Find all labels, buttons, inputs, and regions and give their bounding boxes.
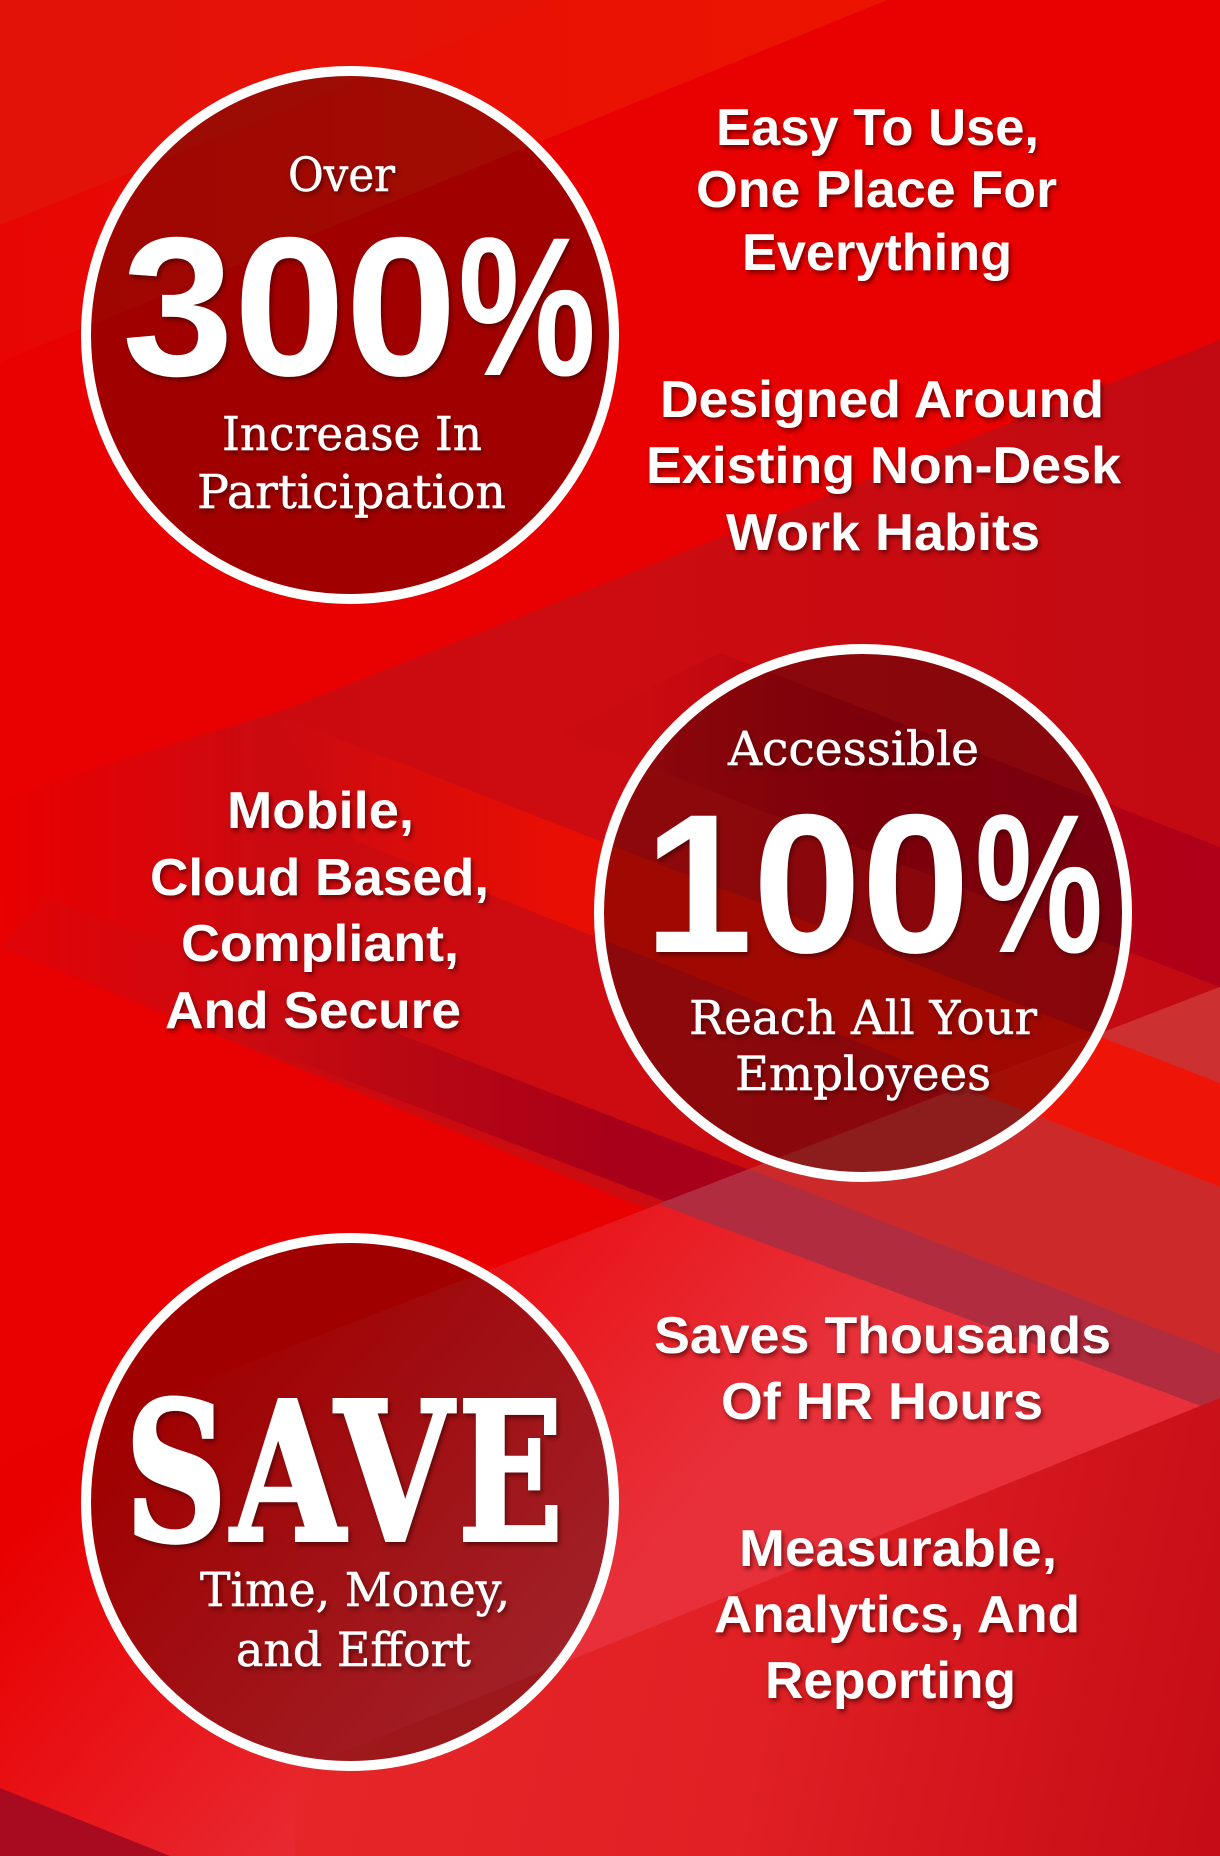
text block: mobile and secure: Compliant, [181,915,459,973]
caption: Increase In Participation: Increase In [222,407,482,462]
text block: designed around habits [646,371,1121,562]
caption: Time, Money, and Effort: Time, Money, [200,1563,510,1618]
circle panel: 300% increase in participation [86,71,614,599]
text block: easy to use: Everything [742,224,1012,282]
stat: 300%: 300 [122,196,457,417]
caption: Increase In Participation: Participation [197,465,506,520]
circle panel: save time money effort [86,1238,614,1766]
caption: Time, Money, and Effort [200,1563,510,1678]
caption: Increase In Participation [197,407,506,520]
circle panel: 100% accessible [599,649,1127,1177]
circle badge [86,1238,614,1766]
stat: SAVE: E [458,1361,563,1586]
stat: SAVE: A [229,1361,347,1586]
text block: saves HR hours: Of HR Hours [721,1373,1043,1431]
stat: 300% [122,196,596,417]
text block: designed around habits: Designed Around [660,371,1104,429]
stat: SAVE [125,1361,563,1586]
text block: mobile and secure [150,782,489,1040]
text block: easy to use [696,99,1057,282]
text block: easy to use: Easy To Use, [716,99,1039,157]
text block: mobile and secure: And Secure [165,982,461,1040]
stat: 100%: 100 [644,773,970,994]
stat: 100%: % [975,773,1103,994]
text block: measurable analytics: Analytics, And [714,1586,1080,1644]
text block: measurable analytics: Reporting [765,1652,1016,1710]
caption: Time, Money, and Effort: and Effort [236,1623,471,1678]
stat: SAVE: S [125,1361,227,1586]
text block: measurable analytics [714,1520,1080,1710]
circle badge [599,649,1127,1177]
label: Accessible: Accessible [727,722,979,777]
text block: designed around habits: Existing Non-Desk [646,437,1121,495]
circle badge [86,71,614,599]
text block: mobile and secure: Cloud Based, [150,849,489,907]
text block: measurable analytics: Measurable, [739,1520,1057,1578]
stat: SAVE: V [333,1361,455,1586]
text block: saves HR hours [654,1307,1111,1431]
caption: Reach All Your Employees: Employees [735,1047,991,1102]
text block: saves HR hours: Saves Thousands [654,1307,1111,1365]
caption: Reach All Your Employees: Reach All Your [689,991,1038,1046]
text block: designed around habits: Work Habits [726,504,1040,562]
stat: 300%: % [458,196,596,417]
caption: Reach All Your Employees [689,991,1038,1102]
label: Over: Over [288,148,395,203]
text block: mobile and secure: Mobile, [227,782,414,840]
text block: easy to use: One Place For [696,161,1057,219]
